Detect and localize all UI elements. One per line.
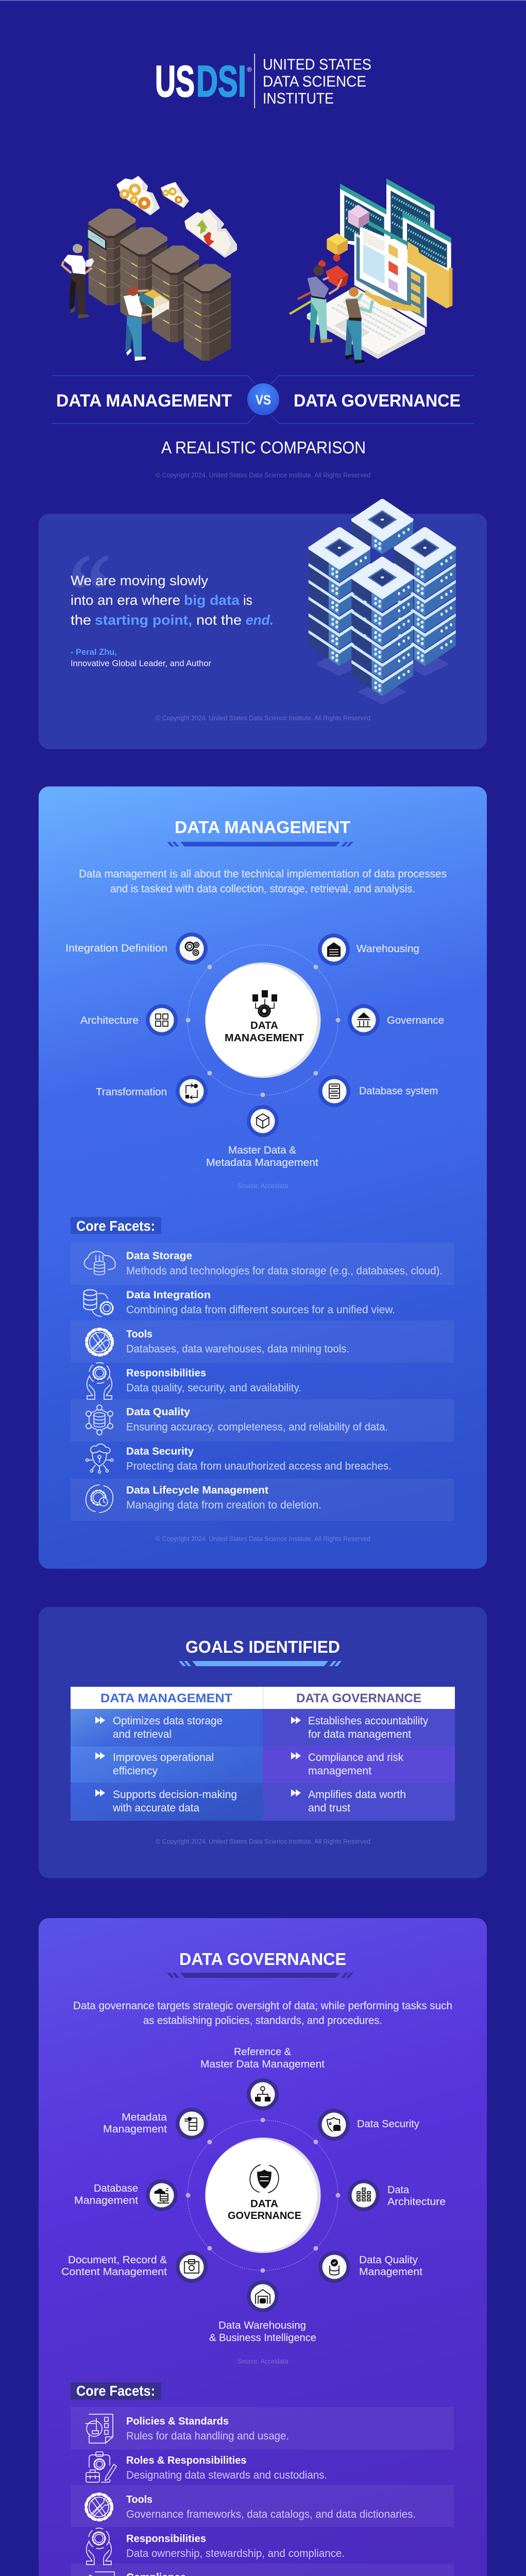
node: warehousing: Warehousing xyxy=(357,943,419,955)
subtitle: A REALISTIC COMPARISON xyxy=(161,438,366,457)
person at drawer xyxy=(124,286,152,361)
red blocks xyxy=(318,254,349,287)
hub: data management: DATA xyxy=(250,1020,278,1031)
icon: shield with orbit xyxy=(250,2165,279,2193)
node: integration definition: Integration Definition xyxy=(65,943,167,954)
node: reference and master data management: Reference & xyxy=(234,2046,292,2058)
list: data governance core facets xyxy=(71,2407,454,2576)
node: document, record and content management: Content Management xyxy=(61,2266,167,2278)
panel: quote xyxy=(39,500,487,749)
facet: data storage xyxy=(71,1243,454,1285)
node: data architecture xyxy=(348,2179,446,2211)
folder xyxy=(408,241,452,308)
goals list: data management: with accurate data xyxy=(112,1802,199,1814)
window: back right xyxy=(386,179,434,244)
hub: data management xyxy=(205,962,320,1078)
description: and is tasked with data collection, storage, retrieval, and analysis. xyxy=(110,883,415,895)
source note: Source: Acceldata xyxy=(237,2358,288,2365)
header: USDSI logo: UNITED STATES xyxy=(263,56,371,73)
node: governance: Governance xyxy=(387,1015,444,1026)
quote text: starting point, xyxy=(95,612,192,628)
facet: policies and standards: Rules for data handling and usage. xyxy=(126,2430,289,2442)
node: metadata management: Metadata xyxy=(122,2112,167,2123)
node: transformation xyxy=(96,1075,208,1107)
quote text: big data xyxy=(184,592,240,608)
goals list: data governance: Amplifies data worth xyxy=(308,1789,406,1801)
title: data governance: DATA GOVERNANCE xyxy=(294,391,461,411)
facet: data quality: Ensuring accuracy, completeness, and reliability of data. xyxy=(126,1421,388,1433)
hub: data governance: DATA xyxy=(250,2198,278,2210)
node: data architecture: Architecture xyxy=(387,2196,446,2208)
header: USDSI logo: US xyxy=(155,57,195,106)
attribution: - Peral Zhu, xyxy=(71,647,117,657)
facet: data security: Data Security xyxy=(126,1446,194,1457)
attribution xyxy=(71,647,211,668)
heading: data management: DATA MANAGEMENT xyxy=(175,818,350,837)
person with teal trousers xyxy=(308,265,342,343)
node: database management: Database xyxy=(94,2183,138,2194)
facet: compliance xyxy=(71,2564,454,2576)
table: goals comparison xyxy=(71,1687,455,1821)
facet: data integration xyxy=(83,1289,395,1316)
facet: data quality: Data Quality xyxy=(126,1406,191,1418)
header: USDSI logo xyxy=(155,54,371,108)
server stack 1 xyxy=(89,209,135,306)
title: data management: DATA MANAGEMENT xyxy=(56,391,232,411)
goals list: data management: and retrieval xyxy=(113,1728,172,1740)
description xyxy=(73,1999,452,2027)
facet: data security xyxy=(86,1444,392,1473)
badge: vs xyxy=(247,383,279,415)
goals list: data management: Supports decision-making xyxy=(113,1789,237,1801)
column header: data management: DATA MANAGEMENT xyxy=(100,1691,232,1705)
facet: data lifecycle management: Data Lifecycle Management xyxy=(126,1484,268,1496)
description: Data management is all about the technical implementation of data processes xyxy=(79,868,447,880)
facet: responsibilities: Data quality, security, and availability. xyxy=(126,1382,301,1394)
open drawer with folders xyxy=(138,290,169,318)
window: back left xyxy=(340,184,388,252)
facet: roles and responsibilities: Roles & Responsibilities xyxy=(126,2454,246,2466)
copyright: © Copyright 2024. United States Data Science Institute. All Rights Reserved xyxy=(156,1535,370,1543)
facet: roles and responsibilities: Designating data stewards and custodians. xyxy=(126,2469,327,2481)
illustration: data governance laptop, windows and people xyxy=(290,179,452,364)
facet: data lifecycle management xyxy=(71,1479,454,1521)
illustration: isometric server towers xyxy=(309,500,456,705)
header: USDSI logo: ® xyxy=(247,66,252,73)
hub: data governance xyxy=(205,2138,320,2253)
node: document, record and content management xyxy=(61,2251,208,2283)
node: data warehousing and business intelligence: Data Warehousing xyxy=(218,2320,306,2331)
quote text: We are moving slowly xyxy=(71,573,209,588)
facet: responsibilities: Data ownership, stewardship, and compliance. xyxy=(126,2548,345,2560)
panel: goals identified xyxy=(39,1607,487,1878)
list: data management core facets xyxy=(71,1243,454,1521)
node: data warehousing and business intelligence xyxy=(209,2280,316,2344)
diagram: data governance wheel xyxy=(61,2046,446,2344)
illustration: data management servers and people xyxy=(62,177,236,361)
goals list: data management: Optimizes data storage xyxy=(113,1715,223,1727)
description xyxy=(79,868,447,895)
node: data warehousing and business intelligence: & Business Intelligence xyxy=(209,2332,316,2344)
facet: data quality xyxy=(71,1399,454,1442)
pencils xyxy=(298,292,312,299)
node: master data and metadata management xyxy=(206,1105,318,1168)
attribution: Innovative Global Leader, and Author xyxy=(71,659,211,668)
facet: tools: Governance frameworks, data catalogs, and data dictionaries. xyxy=(126,2509,416,2520)
facet: data storage: Data Storage xyxy=(126,1250,192,1262)
facet: responsibilities xyxy=(87,2528,345,2565)
hub: data governance: GOVERNANCE xyxy=(228,2210,301,2222)
title block: data management vs data governance xyxy=(52,376,474,423)
facet: tools: Databases, data warehouses, data mining tools. xyxy=(126,1343,349,1355)
cube: yellow xyxy=(327,233,348,256)
copyright: © Copyright 2024. United States Data Science Institute. All Rights Reserved xyxy=(156,472,370,479)
copyright: © Copyright 2024. United States Data Science Institute. All Rights Reserved xyxy=(156,1838,370,1845)
node: database management: Management xyxy=(74,2195,138,2206)
person with brown vest xyxy=(345,287,372,364)
node: data security xyxy=(318,2109,419,2141)
description: Data governance targets strategic oversight of data; while performing tasks such xyxy=(73,1999,452,2012)
facet: tools: Tools xyxy=(126,1328,152,1340)
node: metadata management: Management xyxy=(103,2124,167,2135)
facet: data lifecycle management: Managing data from creation to deletion. xyxy=(126,1499,321,1511)
facet: data integration: Combining data from different sources for a unified view. xyxy=(126,1304,395,1316)
facet: data storage: Methods and technologies for data storage (e.g., databases, cloud). xyxy=(126,1265,443,1277)
node: document, record and content management: Document, Record & xyxy=(68,2255,167,2266)
facet: data integration: Data Integration xyxy=(126,1289,211,1301)
facet: tools: Tools xyxy=(126,2494,152,2505)
icon: cloud with gears xyxy=(117,177,159,214)
goals list: data management: efficiency xyxy=(113,1765,158,1777)
goals list: data governance: Establishes accountability xyxy=(308,1715,428,1727)
node: transformation: Transformation xyxy=(96,1087,167,1098)
quote text: not the xyxy=(196,612,242,628)
goals list: data management xyxy=(95,1715,237,1814)
node: master data and metadata management: Metadata Management xyxy=(206,1157,318,1168)
node: data quality management: Management xyxy=(359,2266,422,2278)
node: data architecture: Data xyxy=(387,2184,410,2196)
quote text: into an era where xyxy=(71,592,180,608)
header: USDSI logo: INSTITUTE xyxy=(263,90,334,107)
node: database management xyxy=(74,2179,178,2211)
cube: lilac xyxy=(348,205,369,228)
node: warehousing xyxy=(318,934,419,965)
laptop base xyxy=(307,287,425,359)
server stack 2 xyxy=(120,227,167,324)
copyright: © Copyright 2024. United States Data Science Institute. All Rights Reserved xyxy=(156,715,370,722)
node: data quality management xyxy=(318,2251,422,2283)
header: USDSI logo: DSI xyxy=(196,57,246,106)
core facets heading: Core Facets: xyxy=(76,2383,155,2399)
goals list: data governance: management xyxy=(308,1765,371,1777)
column header: data governance: DATA GOVERNANCE xyxy=(296,1691,421,1705)
window: right xyxy=(403,212,451,278)
laptop screen xyxy=(354,221,427,327)
quotation mark: “ xyxy=(68,531,110,651)
icon: small cloud with gears xyxy=(162,183,188,207)
icon: documents and gear xyxy=(252,990,277,1016)
server stack 3 xyxy=(152,246,199,342)
description: as establishing policies, standards, and procedures. xyxy=(143,2014,382,2027)
node: reference and master data management xyxy=(200,2046,325,2110)
facet: responsibilities: Responsibilities xyxy=(126,2533,206,2545)
node: master data and metadata management: Master Data & xyxy=(228,1145,297,1156)
row of yellow folders xyxy=(365,290,420,314)
quote text: is xyxy=(243,592,252,608)
node: database system: Database system xyxy=(359,1086,438,1097)
node: data quality management: Data Quality xyxy=(359,2255,418,2266)
goals list: data management: Improves operational xyxy=(113,1752,214,1764)
heading: data governance: DATA GOVERNANCE xyxy=(179,1950,346,1969)
facet: data security: Protecting data from unauthorized access and breaches. xyxy=(126,1460,392,1472)
facet: tools xyxy=(71,1320,454,1363)
core facets heading: Core Facets: xyxy=(76,1218,155,1234)
node: architecture: Architecture xyxy=(80,1015,139,1026)
node: database system xyxy=(318,1075,438,1107)
goals list: data governance: and trust xyxy=(308,1802,350,1814)
facet: responsibilities xyxy=(87,1363,301,1399)
goals list: data governance: for data management xyxy=(308,1728,411,1740)
quote text xyxy=(71,573,274,628)
goals list: data governance: Compliance and risk xyxy=(308,1752,403,1764)
person with tablet xyxy=(62,244,94,318)
panel: data management xyxy=(39,786,487,1569)
facet: policies and standards xyxy=(71,2407,454,2449)
node: architecture xyxy=(80,1004,178,1036)
facet: responsibilities: Responsibilities xyxy=(126,1367,206,1379)
icon: cloud with up and down arrows xyxy=(186,210,236,257)
quote text: the xyxy=(71,612,91,628)
node: data security: Data Security xyxy=(357,2119,419,2130)
node: reference and master data management: Master Data Management xyxy=(200,2059,325,2070)
header: USDSI logo: DATA SCIENCE xyxy=(263,73,366,90)
panel: data governance xyxy=(39,1918,487,2576)
facet: tools xyxy=(71,2485,454,2527)
heading: goals identified: GOALS IDENTIFIED xyxy=(185,1637,340,1656)
facet: roles and responsibilities xyxy=(86,2452,327,2482)
source note: Source: Acceldata xyxy=(237,1182,288,1190)
node: governance xyxy=(348,1004,444,1036)
diagram: data management wheel xyxy=(65,933,444,1168)
server stack 4 xyxy=(184,264,231,361)
facet: policies and standards: Policies & Standards xyxy=(126,2415,229,2427)
badge: vs: VS xyxy=(256,392,271,408)
node: metadata management xyxy=(103,2108,208,2140)
node: integration definition xyxy=(65,933,208,964)
hub: data management: MANAGEMENT xyxy=(225,1032,304,1044)
goals list: data governance xyxy=(291,1715,428,1814)
quote text: end. xyxy=(246,612,274,628)
